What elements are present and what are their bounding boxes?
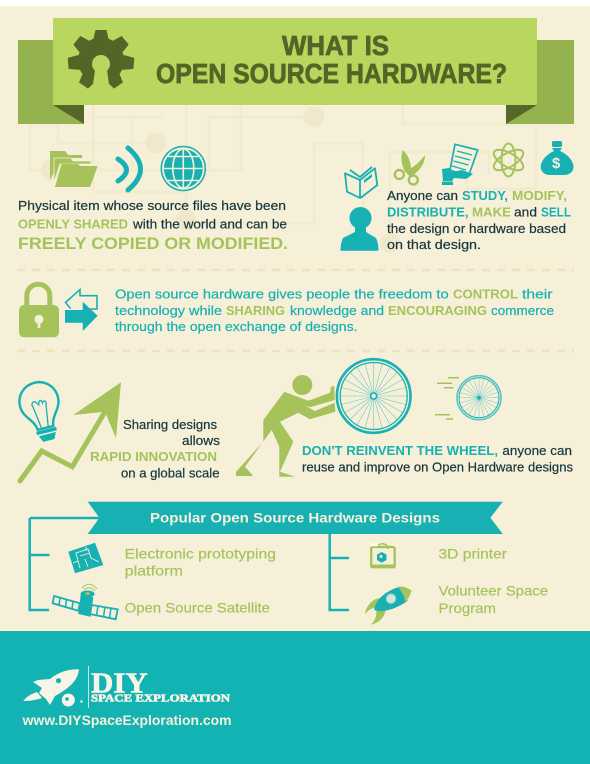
text: freedom description: knowledge and (290, 303, 384, 318)
title text: OPEN SOURCE HARDWARE? (156, 58, 507, 89)
logo wordmark: DIY (91, 667, 148, 699)
text: anyone can description: DISTRIBUTE, (387, 205, 468, 220)
icon: small rolling wheel (457, 376, 501, 420)
text: physical item description: Physical item whose source files have been (18, 198, 286, 213)
title text: WHAT IS (282, 30, 389, 61)
text: freedom description: ENCOURAGING (388, 303, 487, 318)
heading ribbon (88, 502, 503, 534)
text: physical item description (18, 198, 288, 253)
icon: rocket (360, 582, 418, 625)
icon: signal waves (118, 148, 140, 190)
text: electronic prototyping platform (125, 545, 276, 579)
logo divider (87, 666, 90, 708)
footer (0, 631, 590, 764)
text: anyone can description: MAKE (472, 205, 511, 220)
text: don't reinvent the wheel (302, 443, 573, 475)
panel: shared source files (18, 146, 288, 253)
text: anyone can description: MODIFY, (512, 188, 567, 203)
text: freedom description (115, 287, 554, 334)
text: anyone can description: the design or hardware based (387, 221, 566, 236)
text: rapid innovation: on a global scale (121, 466, 220, 481)
icon: padlock (19, 284, 59, 337)
text: 3D printer: 3D printer (438, 545, 507, 561)
text: anyone can description: Anyone can (387, 188, 458, 203)
text: freedom description: commerce (491, 303, 554, 318)
icon: scissors (395, 150, 425, 184)
text: freedom description: technology while (115, 303, 222, 318)
icon: 3D printer (370, 543, 396, 568)
panel: popular designs (30, 502, 548, 625)
text: anyone can description (387, 188, 571, 252)
icon: open source gear (67, 30, 135, 92)
logo wordmark (91, 667, 231, 705)
icon: light bulb (15, 378, 68, 445)
icon: exchange arrows (65, 290, 98, 331)
icon: logo rocket (23, 669, 83, 706)
logo wordmark: SPACE EXPLORATION (91, 694, 231, 705)
icon: growth arrow (20, 382, 121, 481)
text: freedom description: their (522, 287, 553, 302)
text: freedom description: SHARING (226, 303, 285, 318)
text: volunteer space program: Volunteer Space (438, 583, 548, 599)
icon: speed lines (435, 378, 459, 419)
text: volunteer space program (438, 583, 548, 616)
website url: www.DIYSpaceExploration.com (22, 712, 231, 728)
text: don't reinvent the wheel: reuse and improve on Open Hardware designs (302, 460, 573, 475)
text: open source satellite: Open Source Satellite (125, 599, 270, 615)
background circuit pattern (30, 105, 536, 253)
text: physical item description: FREELY COPIED OR MODIFIED. (18, 235, 288, 253)
text: anyone can description: and (514, 205, 537, 220)
icon: circuit board (68, 543, 103, 573)
icon: person (340, 207, 378, 251)
text: rapid innovation: RAPID INNOVATION (90, 449, 217, 464)
text: anyone can description: STUDY, (462, 188, 508, 203)
panel: rapid innovation (15, 378, 221, 481)
text: electronic prototyping platform: platform (125, 563, 183, 579)
icon: money bag (541, 141, 574, 175)
icon: large wheel (337, 359, 411, 433)
icon: satellite (53, 584, 118, 619)
text: anyone can description: on that design. (387, 237, 481, 252)
text: rapid innovation: Sharing designs (123, 417, 217, 432)
text: don't reinvent the wheel: anyone can (502, 443, 572, 458)
icon: document and hand (442, 144, 478, 185)
panel: freedom to control (19, 284, 554, 337)
text: rapid innovation (90, 417, 221, 481)
panel: anyone can (340, 141, 574, 252)
text: freedom description: Open source hardware gives people the freedom to (115, 287, 449, 302)
text: rapid innovation: allows (182, 433, 221, 448)
tree connector lines (30, 518, 349, 610)
text: anyone can description: SELL (541, 205, 571, 220)
text: physical item description: OPENLY SHARED (18, 217, 128, 232)
panel: don't reinvent the wheel (236, 359, 573, 477)
icon: atom (491, 144, 526, 176)
text: freedom description: through the open exchange of designs. (115, 319, 358, 334)
title text (156, 30, 507, 89)
title banner (18, 18, 574, 124)
icon: book (345, 167, 377, 198)
icon: money bag: $ (552, 155, 561, 172)
icon: person pushing (236, 375, 335, 477)
icon: globe (161, 146, 205, 190)
icon: folder (50, 151, 98, 187)
text: physical item description: with the world and can be (132, 217, 287, 232)
text: electronic prototyping platform: Electronic prototyping (125, 545, 276, 561)
text: don't reinvent the wheel: DON'T REINVENT THE WHEEL, (302, 443, 498, 458)
text: freedom description: CONTROL (453, 287, 518, 302)
heading ribbon: Popular Open Source Hardware Designs (150, 509, 440, 525)
text: volunteer space program: Program (438, 600, 496, 616)
